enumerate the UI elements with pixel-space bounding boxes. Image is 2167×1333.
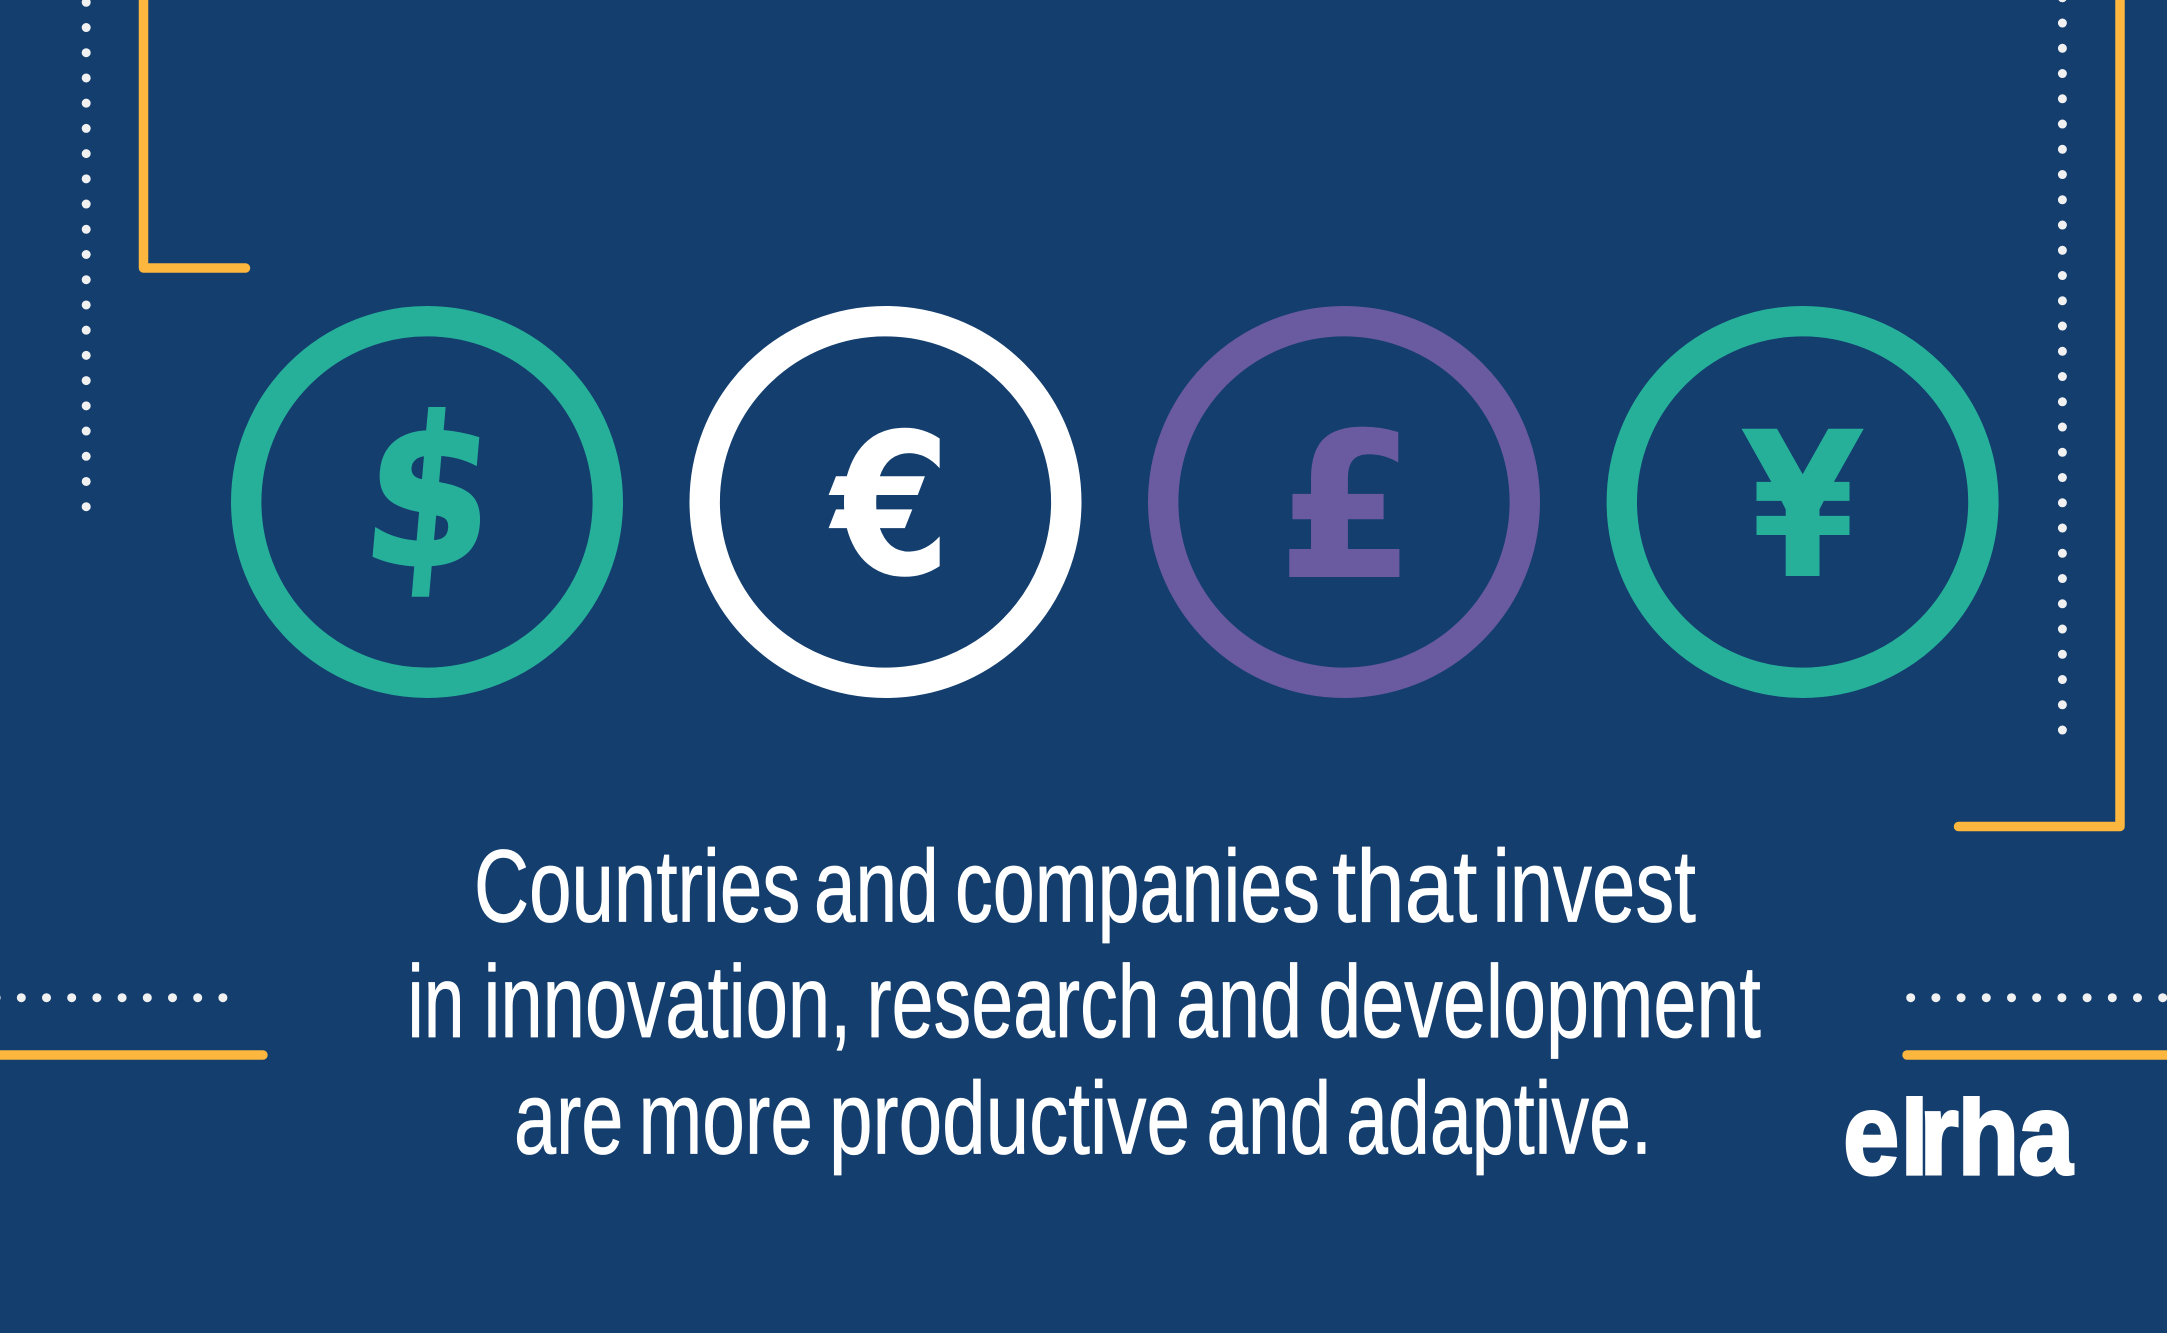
main statement: and	[1176, 944, 1302, 1059]
icon: yen coin: ¥	[1739, 390, 1866, 624]
bottom-right dotted horizontal line	[1911, 993, 2167, 1002]
top-left dotted vertical line	[82, 2, 91, 510]
bottom-right gold line	[1907, 1050, 2167, 1060]
main statement: and	[814, 828, 939, 944]
main statement: and	[1206, 1060, 1331, 1176]
main statement: in	[408, 944, 464, 1059]
icon: dollar coin: $	[354, 375, 504, 614]
bottom-left dotted horizontal line	[0, 993, 226, 1002]
main statement: innovation,	[484, 944, 851, 1059]
main statement	[408, 828, 1761, 1176]
main statement: adaptive.	[1346, 1060, 1652, 1176]
icon: euro coin: €	[828, 392, 951, 621]
main statement: companies	[955, 828, 1320, 944]
main statement: development	[1318, 944, 1761, 1059]
icon: yen coin	[1622, 321, 1983, 683]
icon: pound coin	[1163, 321, 1525, 683]
logo: elrha: elrha	[1843, 1071, 2076, 1200]
icon: pound coin: £	[1278, 390, 1415, 623]
main statement: productive	[829, 1060, 1190, 1176]
icon: dollar coin	[246, 321, 608, 683]
bottom-left gold line	[0, 1050, 263, 1060]
main statement: that	[1332, 828, 1477, 944]
main statement: invest	[1492, 828, 1696, 944]
main statement: Countries	[474, 828, 800, 944]
main statement: more	[638, 1060, 813, 1176]
main statement: are	[514, 1060, 623, 1176]
right gold bracket	[1958, 0, 2120, 826]
icon: euro coin	[705, 321, 1066, 683]
main statement: research	[866, 944, 1160, 1059]
top-left gold bracket	[144, 0, 246, 268]
top-right dotted vertical line	[2058, 0, 2067, 733]
